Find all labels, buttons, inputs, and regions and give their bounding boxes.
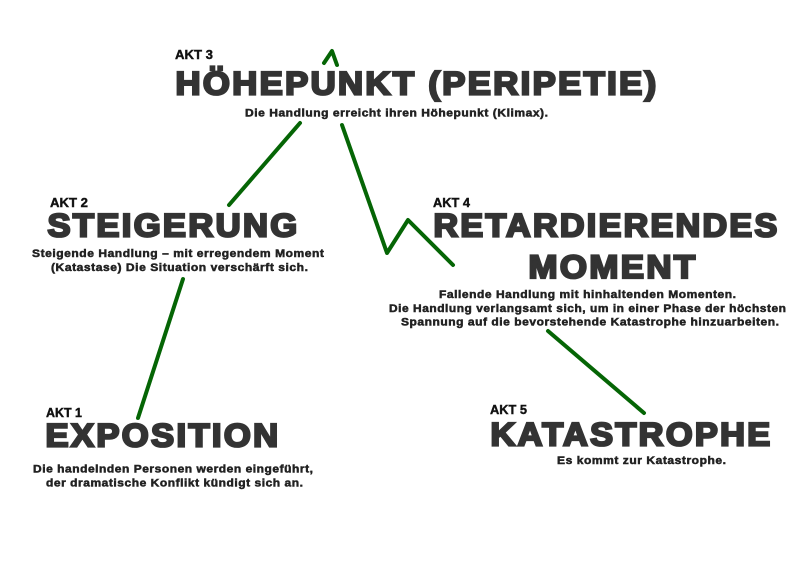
text block: act 4 description xyxy=(389,289,786,329)
arrow: rising line from Steigerung to Höhepunkt xyxy=(229,123,300,205)
text block: act 2 description xyxy=(32,248,324,274)
act label: Akt 3: AKT 3 xyxy=(175,48,213,62)
panel: act 3 xyxy=(175,48,658,120)
panel: act 1 xyxy=(33,406,314,490)
text block: act 1 description: Die handelnden Personen werden eingeführt, xyxy=(33,464,314,476)
act label: Akt 2: AKT 2 xyxy=(50,196,88,210)
act label: Akt 1: AKT 1 xyxy=(46,406,82,420)
panel: act 5 xyxy=(490,403,772,467)
heading: Retardierendes Moment xyxy=(434,208,780,285)
arrow: falling zigzag line from Höhepunkt to Retardierendes Moment xyxy=(342,125,453,265)
text block: act 4 description: Die Handlung verlangsamt sich, um in einer Phase der höchsten xyxy=(389,303,786,315)
heading: Retardierendes Moment: RETARDIERENDES xyxy=(434,208,780,244)
text block: act 4 description: Fallende Handlung mit hinhaltenden Momenten. xyxy=(439,289,736,301)
heading: Höhepunkt: HÖHEPUNKT (PERIPETIE) xyxy=(176,66,658,102)
text block: act 2 description: Steigende Handlung – mit erregendem Moment xyxy=(32,248,324,260)
heading: Retardierendes Moment: MOMENT xyxy=(528,249,698,285)
heading: Steigerung: STEIGERUNG xyxy=(48,208,300,244)
text block: act 2 description: (Katastase) Die Situation verschärft sich. xyxy=(51,262,308,274)
panel: act 4 xyxy=(389,196,786,329)
text block: act 4 description: Spannung auf die bevorstehende Katastrophe hinzuarbeiten. xyxy=(401,317,780,329)
arrow: rising line from Exposition to Steigerung xyxy=(138,279,183,418)
text block: act 1 description xyxy=(33,464,314,490)
panel: act 2 xyxy=(32,196,324,274)
heading: Katastrophe: KATASTROPHE xyxy=(490,416,772,452)
arrow: peak caret above Höhepunkt xyxy=(324,51,337,65)
text block: act 5 description: Es kommt zur Katastrophe. xyxy=(557,455,726,467)
act label: Akt 4: AKT 4 xyxy=(433,196,470,210)
arrow: falling line from Retardierendes Moment to Katastrophe xyxy=(548,331,644,413)
heading: Exposition: EXPOSITION xyxy=(46,418,280,454)
text block: act 1 description: der dramatische Konflikt kündigt sich an. xyxy=(46,478,304,490)
text block: act 3 description: Die Handlung erreicht ihren Höhepunkt (Klimax). xyxy=(245,108,548,120)
act label: Akt 5: AKT 5 xyxy=(490,403,527,417)
